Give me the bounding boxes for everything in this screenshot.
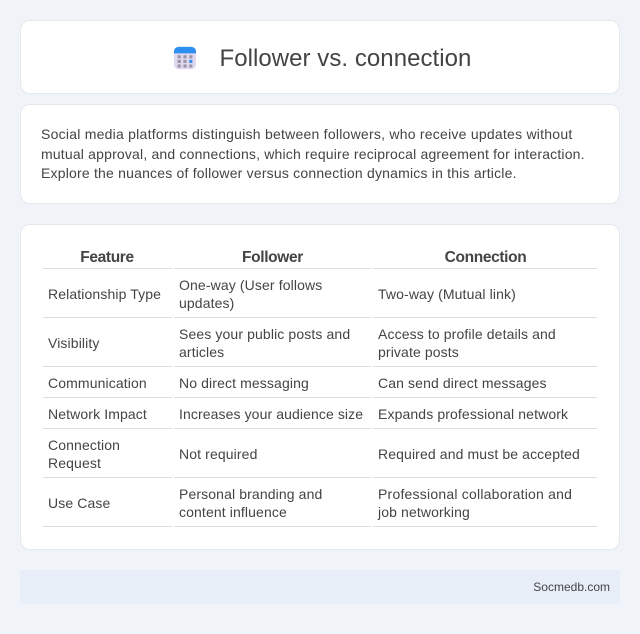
row: Relationship Type: updates) <box>179 295 234 311</box>
intro text: Social media platforms distinguish between followers, who receive updates without <box>41 126 572 142</box>
row: Connection Request: Connection <box>48 437 120 453</box>
row: Network Impact <box>48 406 568 422</box>
row: Use Case: Personal branding and <box>179 486 322 502</box>
row: Connection Request <box>48 437 580 471</box>
row: Relationship Type: Relationship Type <box>48 286 161 302</box>
row: Visibility: Access to profile details and <box>378 326 556 342</box>
title text: Follower vs. connection <box>220 45 471 72</box>
header: Follower: Follower <box>242 249 303 266</box>
row: Relationship Type <box>48 277 516 311</box>
row: Use Case <box>48 486 572 520</box>
intro text <box>41 126 585 181</box>
row: Visibility <box>48 326 556 360</box>
row: Visibility: articles <box>179 344 224 360</box>
row: Connection Request: Required and must be accepted <box>378 446 580 462</box>
row: Communication: No direct messaging <box>179 375 309 391</box>
table panel <box>20 224 620 550</box>
row: Network Impact: Expands professional network <box>378 406 568 422</box>
footer bar <box>20 570 620 604</box>
intro text: mutual approval, and connections, which require reciprocal agreement for interaction. <box>41 146 585 162</box>
row: Visibility: Visibility <box>48 335 100 351</box>
header: Feature: Feature <box>80 249 134 266</box>
icon: calendar <box>174 46 196 70</box>
row: Connection Request: Not required <box>179 446 257 462</box>
intro text: Explore the nuances of follower versus connection dynamics in this article. <box>41 165 517 181</box>
row: Communication: Can send direct messages <box>378 375 547 391</box>
row: Visibility: private posts <box>378 344 459 360</box>
header: Connection: Connection <box>445 249 526 266</box>
intro panel <box>20 104 620 204</box>
row: Relationship Type: One-way (User follows <box>179 277 322 293</box>
table <box>43 249 597 527</box>
title panel <box>20 20 620 94</box>
row: Network Impact: Increases your audience size <box>179 406 363 422</box>
row: Communication: Communication <box>48 375 147 391</box>
row: Connection Request: Request <box>48 455 101 471</box>
row: Visibility: Sees your public posts and <box>179 326 350 342</box>
row: Use Case: job networking <box>378 504 470 520</box>
row: Use Case: Use Case <box>48 495 110 511</box>
footer text: Socmedb.com <box>533 580 610 594</box>
row: Communication <box>48 375 547 391</box>
row: Relationship Type: Two-way (Mutual link) <box>378 286 516 302</box>
row: Use Case: Professional collaboration and <box>378 486 572 502</box>
row: Network Impact: Network Impact <box>48 406 147 422</box>
row: Use Case: content influence <box>179 504 287 520</box>
